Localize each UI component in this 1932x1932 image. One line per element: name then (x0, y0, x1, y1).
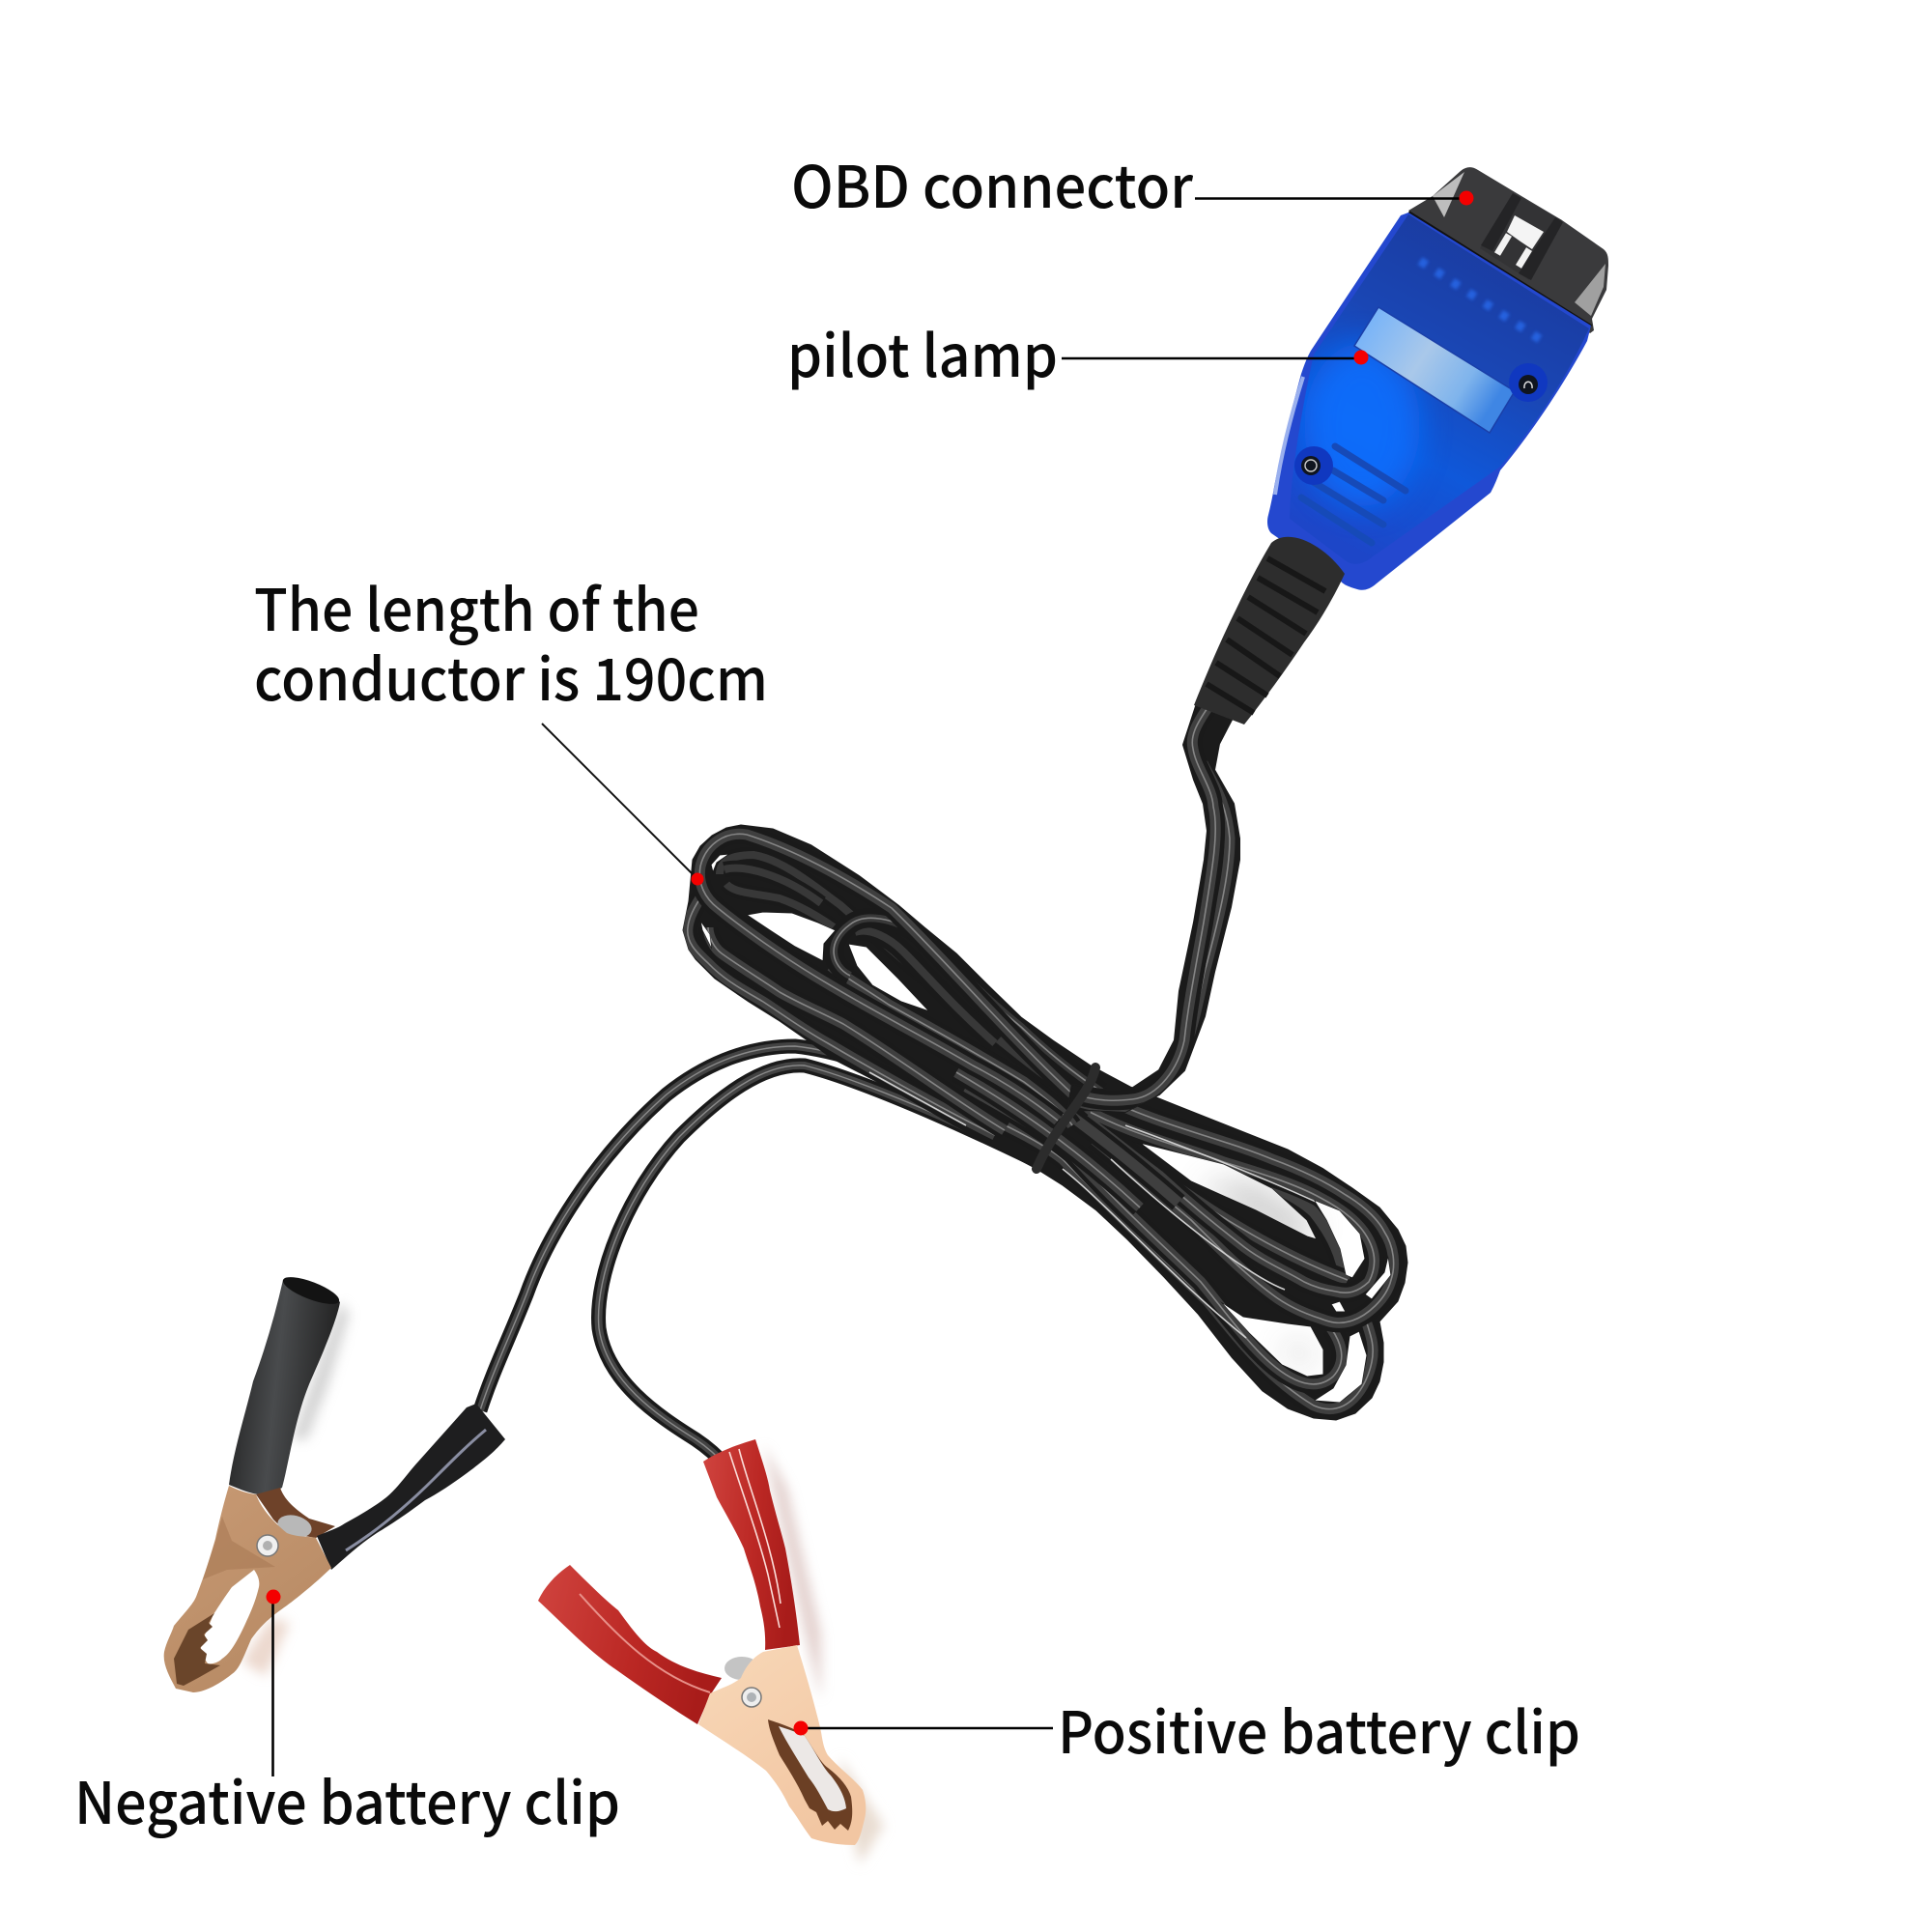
jaw teeth (174, 1613, 220, 1686)
lower handle (538, 1565, 722, 1724)
cable: coiled black wire bundle (480, 700, 1407, 1466)
negative battery clip (black) (164, 1271, 505, 1692)
label: pilot lamp (787, 310, 1058, 394)
screw right (1509, 363, 1548, 402)
lower handle (317, 1404, 505, 1570)
callout: OBD connector (791, 141, 1474, 225)
cable tie (1037, 1067, 1095, 1169)
hinge and spring (256, 1488, 335, 1541)
jaw shading (203, 1517, 275, 1579)
upper handle (703, 1439, 800, 1650)
OBD connector assembly (1194, 167, 1608, 724)
label: Negative battery clip (74, 1757, 620, 1841)
plug: black OBD head (1408, 167, 1608, 333)
callout: positive battery clip (794, 1687, 1580, 1771)
upper handle shadow (763, 1444, 821, 1700)
cable: strand bands (688, 834, 1394, 1409)
housing: translucent blue body (1267, 213, 1591, 590)
cable: bundle silhouette (683, 825, 1407, 1420)
positive battery clip (red) (538, 1439, 884, 1864)
cable: lead dropping from the connector (1067, 700, 1239, 1112)
soft shadows behind cable bundle (1198, 1183, 1319, 1372)
label: Positive battery clip (1058, 1687, 1580, 1771)
shadow (840, 1758, 884, 1864)
callout: pilot lamp (787, 310, 1368, 394)
marker dot (1459, 191, 1474, 205)
leader line (542, 724, 697, 879)
jaw inner light (779, 1726, 846, 1811)
label: The length of the (254, 564, 699, 648)
upper handle (229, 1271, 342, 1494)
callout: conductor length (254, 564, 768, 885)
label second line: conductor is 190cm (254, 634, 768, 718)
marker dot (692, 873, 703, 885)
marker dot (267, 1590, 280, 1604)
leader line (801, 1727, 1053, 1729)
marker dot (794, 1721, 808, 1735)
rivet (742, 1688, 761, 1707)
callout: negative battery clip (74, 1590, 620, 1841)
screw left (1294, 446, 1333, 485)
strain relief (1194, 537, 1345, 724)
jaw opening (201, 1570, 259, 1663)
marker dot (1354, 350, 1368, 365)
lamp window (1354, 307, 1515, 433)
upper handle shadow (292, 1302, 350, 1439)
jaw opening (768, 1719, 852, 1831)
shadow (242, 1618, 290, 1676)
leader line (1195, 197, 1466, 200)
leader line (271, 1597, 274, 1776)
cable: positive battery wire (599, 1065, 1063, 1466)
hinge spring (724, 1657, 759, 1680)
copper jaw (164, 1486, 331, 1692)
vent slots (1301, 446, 1406, 543)
copper jaw (698, 1645, 866, 1845)
leader line (1062, 357, 1361, 359)
label: OBD connector (791, 141, 1193, 225)
cable: negative battery wire (480, 1046, 1024, 1410)
rivet (257, 1535, 278, 1556)
